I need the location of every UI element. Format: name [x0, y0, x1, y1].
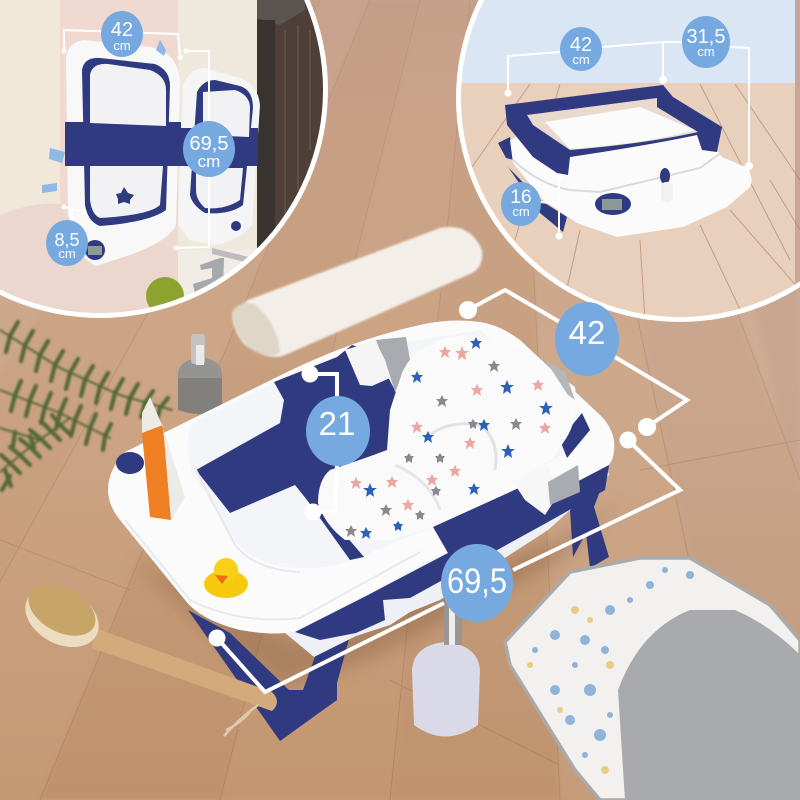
bath support pad with stars	[318, 335, 576, 540]
tub basin	[188, 330, 590, 568]
callout 8,5 cm	[46, 220, 88, 266]
soap dispenser grey	[178, 334, 222, 414]
callout 21 main	[306, 396, 370, 466]
plant branches	[0, 322, 172, 490]
blanket print	[532, 567, 694, 758]
callout 31,5 cm: cm	[697, 44, 715, 59]
small plant	[146, 277, 184, 308]
latch	[660, 168, 670, 184]
inset lines left	[64, 30, 209, 248]
callout 16 cm	[501, 182, 541, 226]
callout 42 main: 42	[569, 314, 605, 351]
tub front folding leg	[188, 610, 352, 741]
callout 42 cm: 42	[111, 19, 133, 41]
right inner wall	[560, 413, 590, 458]
callout 69,5 main: 69,5	[447, 562, 507, 601]
callout 42 cm right: 42	[570, 34, 592, 56]
navy fabric wall	[196, 345, 400, 560]
callout 69,5 main	[441, 544, 513, 622]
callout 21 main: 21	[319, 405, 355, 442]
tub white rim	[108, 321, 614, 634]
callout 42 cm right	[560, 27, 602, 71]
navy lower side pieces	[498, 137, 567, 232]
callout 69,5 cm: cm	[198, 152, 220, 171]
wall bracket bar	[212, 248, 248, 262]
large wall tub	[65, 40, 181, 266]
inset floor planks	[470, 84, 800, 320]
tub thermometer display	[116, 452, 144, 474]
inset: folded tub	[450, 0, 800, 333]
rolled towel	[232, 227, 482, 357]
callout 31,5 cm	[682, 16, 730, 68]
display	[595, 193, 631, 215]
inset lines right	[508, 42, 749, 236]
bath brush	[15, 574, 277, 736]
inset: wall-mounted storage	[0, 0, 337, 330]
tub right leg	[555, 467, 609, 568]
faucet	[193, 258, 224, 294]
tub front navy band and strap	[295, 415, 614, 640]
white notch in far wall	[345, 340, 390, 386]
callout 42 cm: cm	[113, 38, 131, 53]
measurement lines main	[217, 290, 687, 692]
blue wall hooks	[42, 40, 166, 193]
callout 8,5 cm: cm	[58, 246, 76, 261]
callout 69,5 cm	[183, 121, 235, 177]
callout 16 cm: 16	[510, 187, 532, 208]
lotion bottle	[412, 605, 480, 736]
callout 42 main	[555, 302, 619, 376]
callout 69,5 cm: 69,5	[190, 133, 228, 155]
small wall tub	[178, 68, 260, 245]
rubber duck	[204, 558, 248, 598]
folded blanket	[505, 558, 800, 800]
callout 8,5 cm: 8,5	[54, 230, 80, 250]
callout 31,5 cm: 31,5	[687, 26, 725, 48]
white base	[510, 135, 752, 237]
tub lower body	[284, 440, 609, 657]
navy handle frame	[505, 85, 722, 175]
callout 42 cm	[101, 11, 143, 57]
tray shading	[125, 470, 420, 620]
grey mat	[618, 610, 800, 800]
tub floor shadow	[130, 500, 620, 690]
callout 42 cm right: cm	[572, 52, 590, 67]
callout 16 cm: cm	[512, 204, 530, 219]
orange tube	[142, 397, 185, 520]
measurement dots main	[208, 301, 656, 646]
grey strap far side	[375, 337, 410, 392]
pad stars	[350, 346, 551, 511]
